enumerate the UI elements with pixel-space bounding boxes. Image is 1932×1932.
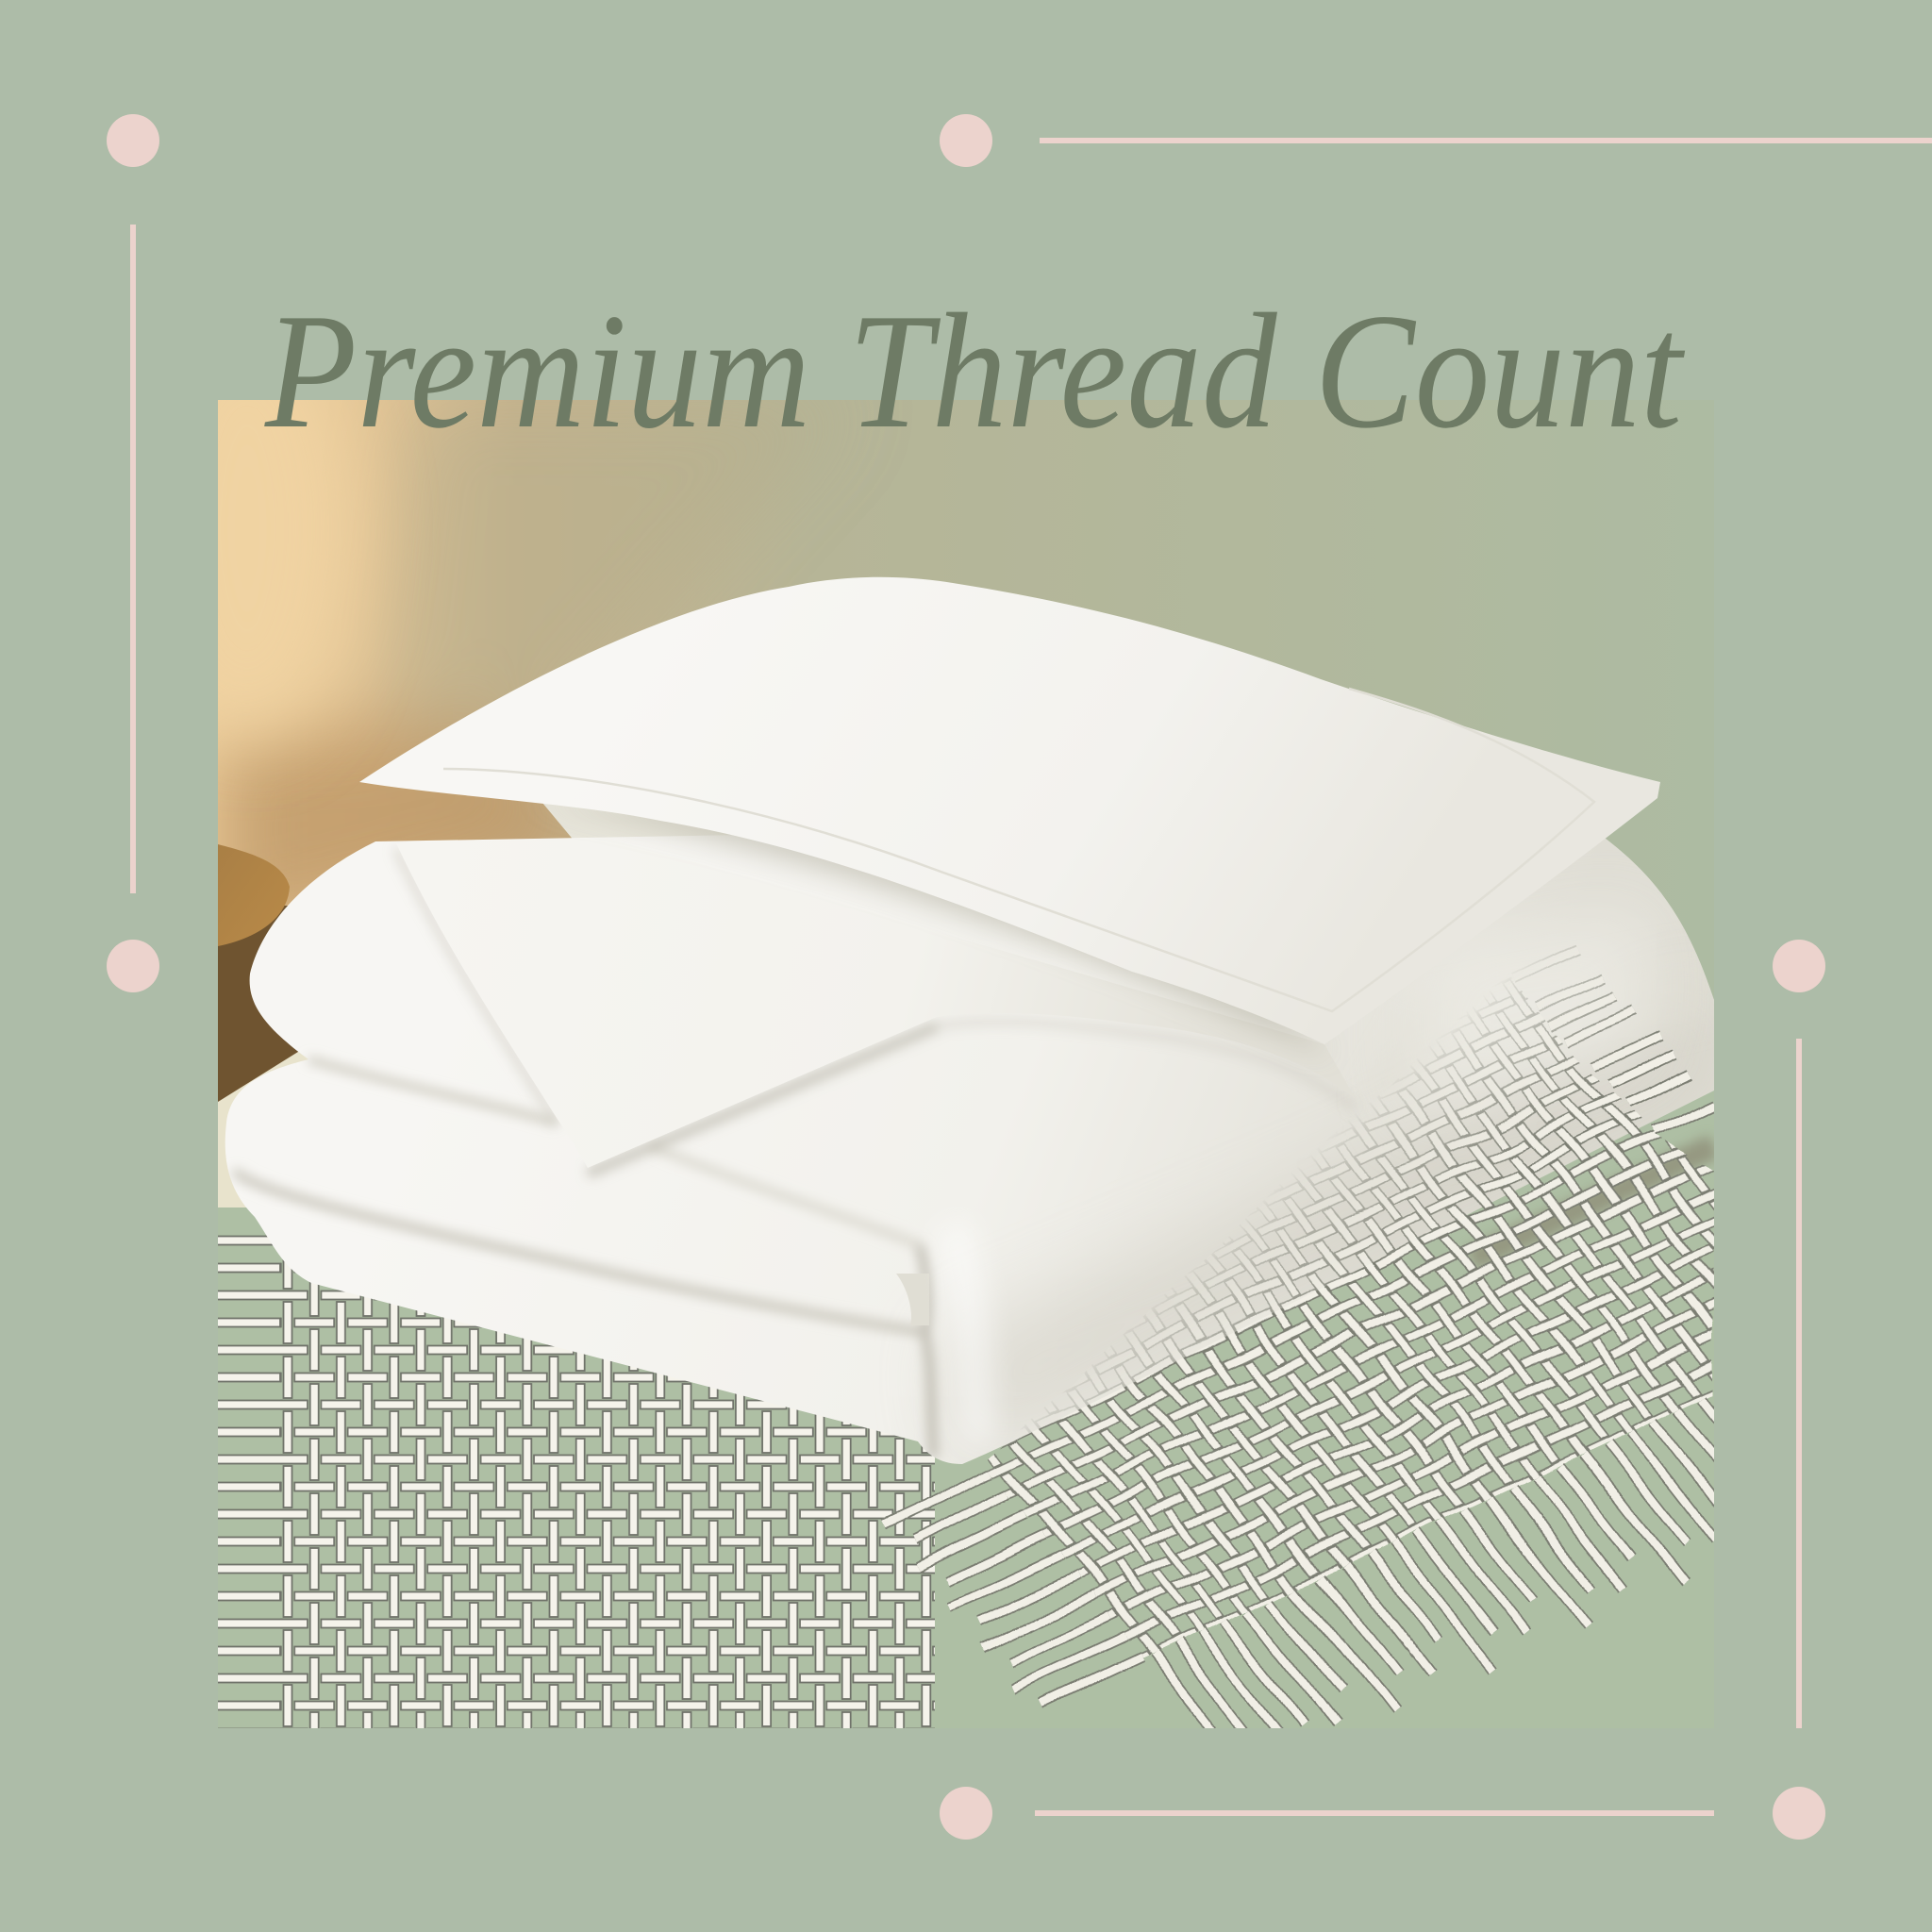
duvet flap <box>400 850 1277 1168</box>
line right <box>1796 1039 1802 1728</box>
title: Premium Thread Count <box>264 279 1686 462</box>
flap shadow <box>396 849 1356 1174</box>
duvet body <box>225 821 1714 1464</box>
pillow flange seams <box>443 689 1594 1011</box>
dot left middle <box>107 940 159 992</box>
line bottom <box>1035 1810 1714 1816</box>
green surface <box>218 906 1302 1728</box>
side table <box>218 844 298 1102</box>
dot top left <box>107 114 159 167</box>
shadow band beside duvet <box>1472 1146 1714 1259</box>
dot top centre <box>940 114 992 167</box>
diagonal weave fading over duvet <box>883 948 1782 1766</box>
lamp light glow <box>231 426 344 749</box>
panel: bedroom photo <box>218 400 1714 1728</box>
wall <box>218 400 1547 906</box>
back of duvet under pillow <box>538 797 849 877</box>
dot right middle <box>1773 940 1825 992</box>
pillow <box>359 577 1660 1057</box>
dot bottom centre <box>940 1787 992 1840</box>
straight woven fabric swatch <box>218 1226 935 1728</box>
cream mattress edge <box>218 1038 321 1226</box>
lamp shade shadow on wall <box>218 406 581 906</box>
pillow body <box>359 577 1660 1044</box>
dot bottom right <box>1773 1787 1825 1840</box>
line top <box>1040 138 1932 143</box>
loose woven fabric swatch <box>881 1102 1714 1728</box>
duvet shading <box>234 906 1714 1464</box>
line left <box>130 225 136 893</box>
duvet folded <box>225 797 1714 1464</box>
pillow shadow <box>587 809 1317 1047</box>
